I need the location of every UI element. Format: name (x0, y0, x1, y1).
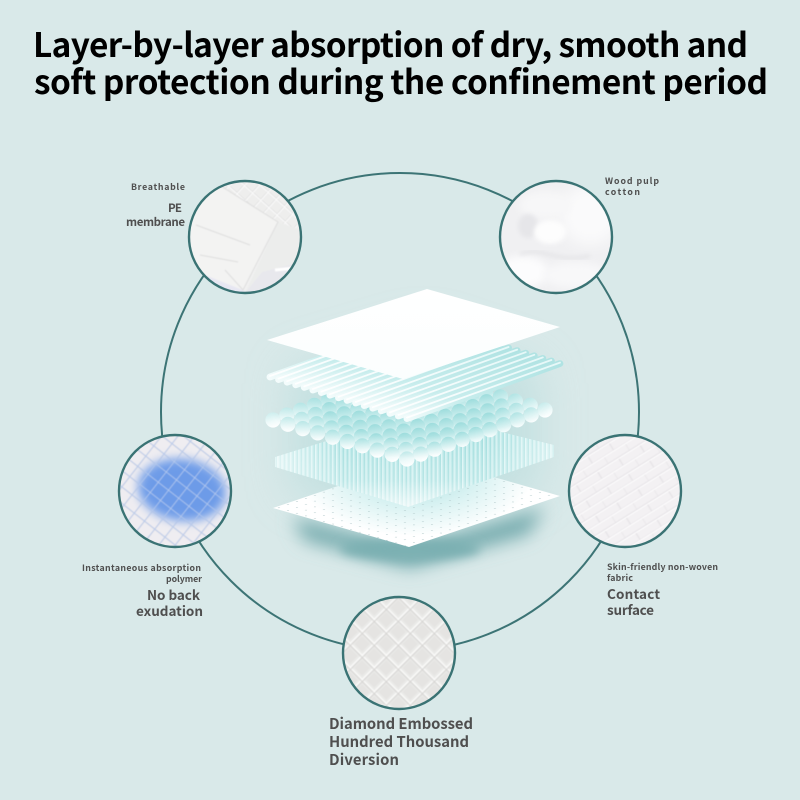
label: contact surface: fabric (607, 571, 633, 584)
title: Layer-by-layer absorption of dry, smooth and (33, 18, 748, 67)
label: diamond embossed: Hundred Thousand (329, 731, 469, 752)
label: PE membrane (126, 180, 185, 230)
label: contact surface: surface (607, 599, 654, 619)
label: contact surface: Skin-friendly non-woven (607, 560, 718, 573)
layer: contact sheet with perforations (273, 457, 560, 547)
texture: blue polymer mesh (119, 435, 231, 547)
panel: contact surface (569, 435, 718, 619)
glow behind layers (290, 330, 540, 530)
title: soft protection during the confinement period (34, 55, 768, 104)
ring: PE membrane (189, 181, 301, 293)
ring: diamond embossed (343, 597, 455, 709)
layer: spike channels (275, 412, 554, 507)
connecting ring (161, 173, 639, 651)
label: contact surface (607, 560, 718, 619)
panel: diamond embossed (329, 597, 473, 770)
ring: contact surface (569, 435, 681, 547)
layered absorbent core illustration (265, 289, 560, 568)
ring: polymer (119, 435, 231, 547)
label: PE membrane: Breathable (131, 180, 185, 193)
label: diamond embossed: Diamond Embossed (329, 713, 473, 734)
label: contact surface: Contact (607, 583, 660, 603)
texture: diamond emboss (343, 597, 455, 709)
ring: cotton (500, 181, 612, 293)
label: no back exudation: Instantaneous absorption (82, 561, 201, 574)
layer: wood pulp tubes (270, 321, 560, 419)
label: wood pulp cotton: Wood pulp (605, 174, 659, 187)
texture: cotton (501, 182, 611, 292)
label: diamond embossed (329, 713, 473, 770)
texture: non-woven fabric (569, 435, 681, 547)
texture: PE membrane (189, 181, 301, 293)
floor shadow (292, 508, 545, 568)
title (33, 18, 768, 104)
label: PE membrane: PE (168, 200, 182, 216)
label: PE membrane: membrane (126, 214, 185, 230)
label: wood pulp cotton (605, 174, 659, 198)
label: no back exudation: polymer (166, 572, 202, 585)
panel: PE membrane (126, 180, 301, 293)
panel: absorption polymer (82, 435, 231, 620)
layer: absorption polymer beads (266, 389, 552, 467)
label: no back exudation (82, 561, 203, 620)
layer: breathable top sheet (267, 289, 560, 379)
label: no back exudation: exudation (136, 600, 203, 620)
label: no back exudation: No back (147, 584, 201, 604)
label: diamond embossed: Diversion (329, 749, 399, 770)
label: wood pulp cotton: cotton (605, 185, 640, 198)
panel: wood pulp cotton (496, 174, 659, 293)
